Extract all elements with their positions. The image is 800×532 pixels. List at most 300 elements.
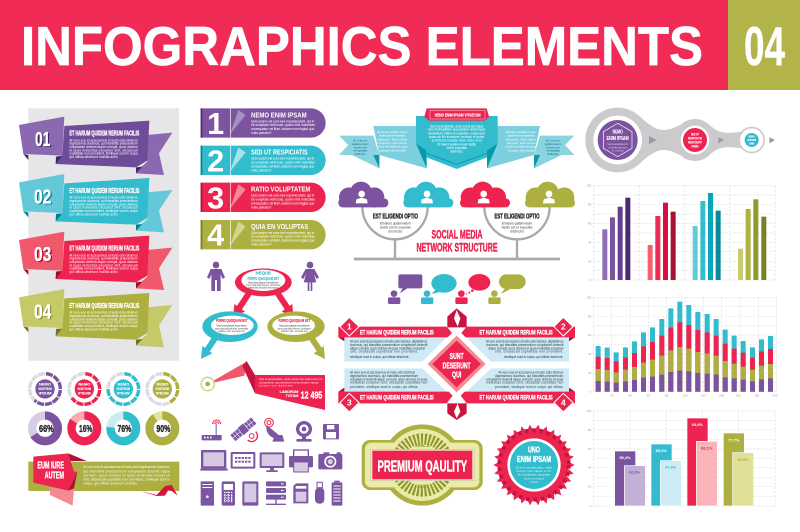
speech diagram: ipsum quia dolor sit amet, consectetur: [215, 327, 249, 330]
paired bar chart: 55,8%: [737, 457, 749, 462]
ribbon 03: dignissimos ducimus, qui blanditiis praesentium: [69, 257, 138, 261]
icon: battery: [332, 481, 342, 506]
icon: floppy disk: [323, 424, 339, 439]
ribbon 02: ET HARUM QUIDEM RERUM FACILIS: [69, 186, 139, 195]
light blue text panels: [344, 337, 569, 392]
ribbon 02: [19, 174, 172, 232]
stacked bar chart: 160: [736, 393, 741, 397]
panel body text: [350, 340, 564, 389]
speech diagram: PORRO QUISQUAM EST: [278, 318, 310, 323]
ribbon 01: [19, 117, 172, 175]
icon: man: [207, 262, 225, 291]
paired bar chart: 77,7%: [728, 438, 740, 443]
column chart: [586, 184, 775, 282]
folded banner: Et harum quidem rerum facilis: [437, 142, 476, 146]
folded banner: error sit voluptatem accusantium doloremque: [428, 128, 485, 132]
folded banner: Et harum: [546, 139, 560, 143]
speech diagram: PORRO QUISQUAM EST: [216, 318, 248, 323]
process flow: NOSTRUM: [747, 138, 756, 142]
social media heading: SOCIAL MEDIA: [431, 227, 483, 241]
ribbon 02: 02: [34, 186, 51, 208]
ribbon 01: ET HARUM QUIDEM RERUM FACILIS: [69, 129, 139, 138]
central diamond: [421, 328, 492, 400]
column chart: 40: [588, 240, 592, 244]
stacked bar chart: 60: [647, 393, 650, 397]
icon: usb stick: [315, 482, 324, 504]
panel: circular gauges: 16%: [79, 424, 92, 435]
ribbon 04: dignissimos ducimus, qui blanditiis praesentium: [69, 314, 138, 318]
folded banner: architecto beatae vitae dicta sunt: [432, 139, 482, 143]
process flow: [585, 108, 775, 172]
tab 3: 3: [207, 181, 224, 215]
cloud: purple: [338, 182, 388, 207]
ribbon 01: 01: [35, 129, 50, 151]
network labels left: facilis est et expedita: [380, 226, 411, 230]
tab 4: 4: [207, 219, 224, 253]
column chart: 80: [588, 203, 592, 207]
ribbon 02: cupiditate non provident, similique sunt in culpa: [69, 209, 138, 213]
panel: circular gauges: 66%: [39, 424, 54, 435]
tab 2: Quis autem vel eum iure reprehenderit, qui in: [251, 157, 314, 161]
folded banner: et expedita: [354, 149, 367, 153]
panel body text: dignissimos ducimus, qui blanditiis praesentium: [350, 374, 419, 378]
folded banner: quae ab illo inventore veritatis et quasi: [429, 135, 484, 139]
panel body text: similique sunt in culpa, qui officia deserunt.: [350, 355, 409, 359]
icon: person olive: [488, 290, 501, 304]
header banner: [0, 0, 800, 90]
folded banner: tempore, cum soluta: [378, 141, 407, 145]
folded banner: facilis est et expedita: [508, 134, 535, 138]
folded banner: quidem rerum: [352, 142, 369, 146]
ribbon 04: 04: [35, 302, 53, 324]
folded banner: et expedita: [546, 149, 560, 153]
tab 2: SED UT RESPICIATIS: [251, 150, 308, 157]
panel: people icons under bubbles: [388, 290, 501, 304]
folded banner: [339, 108, 574, 169]
tab 3: consequatur, vel illum, dolorem eum fugiat, quo: [251, 201, 314, 205]
process flow: omnis iste natus error: [608, 146, 627, 149]
column chart: 60: [588, 221, 592, 225]
panel body text: atque corrupti, quos dolores et quas molestias excepturi: [350, 346, 425, 350]
tab 2: consequatur, vel illum, dolorem eum fugiat, quo: [251, 164, 314, 168]
folded banner: NEMO ENIM IPSAM VITAECUM: [435, 112, 481, 118]
tab 1: 1: [207, 107, 224, 141]
ribbon callout: At vero eos et accusamus et iusto odio dignissimos ducimus,: [83, 465, 170, 469]
band headings: [360, 329, 553, 401]
speech diagram: adipisci velit, sed quia non numquam: [248, 287, 279, 290]
badge: starburst seal: Sed ut perspiciatis, unde: [516, 465, 553, 469]
ribbon 01: et quas molestias excepturi sint, obcaecati: [69, 148, 138, 152]
stacked bar chart: 20: [611, 393, 614, 397]
network labels right: EST ELIGENDI OPTIO: [494, 213, 540, 220]
panel: circular gauges: NEMO: [39, 381, 51, 386]
badge: starburst seal: ENIM IPSAM: [517, 455, 551, 464]
panel: circular gauges: IPSUM: [117, 391, 130, 396]
ribbon 01: dignissimos ducimus, qui blanditiis praesentium: [69, 142, 138, 146]
pointer flag: [201, 361, 325, 410]
band headings: ET HARUM QUIDEM RERUM FACILIS: [479, 329, 553, 336]
network labels right: [494, 213, 540, 234]
icon: woman: [301, 262, 319, 291]
badge: starburst seal: [493, 425, 575, 505]
folded banner: distinctio.: [547, 152, 559, 156]
cloud: olive: [525, 182, 575, 207]
network labels right: facilis est et expedita: [502, 226, 532, 230]
paired bar chart: 80: [588, 428, 592, 432]
ribbon callout: corrupti, quos dolores et quas molestias excepturi: [83, 473, 170, 477]
paired bar chart: 58,4%: [619, 455, 631, 460]
paired bar chart: 60: [588, 447, 592, 451]
folded banner: distinctio. Nam libero: [506, 137, 536, 141]
panel: circular gauges: 76%: [117, 424, 131, 435]
panel: circular gauges: IPSUM: [78, 391, 91, 396]
ribbon 02: 02: [35, 187, 53, 209]
paired bar chart: 93,9%: [692, 422, 703, 427]
panel: circular gauges: NEMO: [78, 381, 90, 386]
speech diagram: NEQUE: [256, 271, 271, 276]
ribbon 01: qui officia deserunt mollitia anim: [69, 155, 118, 159]
speech diagram: Neque porro quisquam est qui dolorem: [248, 281, 279, 284]
panel body text: provident, similique sunt in culpa, qui officia.: [350, 385, 418, 389]
speech diagram: ipsum quia dolor sit amet, consectetur: [246, 284, 281, 287]
icon: tablet: [231, 452, 255, 469]
pointer flag: 12 495: [301, 390, 323, 401]
ribbon 04: At vero eos et accusamus et iusto odio dicimus: [69, 311, 138, 315]
tab 2: [201, 144, 326, 178]
panel: circular gauges: NEMO: [156, 381, 168, 386]
folded banner: facilis est et expedita: [379, 134, 406, 138]
process flow: sit voluptat: [612, 150, 624, 153]
ribbon 04: [19, 289, 172, 347]
network labels right: distinctio: [510, 230, 524, 234]
ribbon 01: voluptatum deleniti atque corrupti, quos dolores: [69, 145, 138, 149]
network labels left: EST ELIGENDI OPTIO: [373, 213, 418, 220]
stacked bar chart: 80: [588, 314, 592, 318]
paired bar chart: 68,1%: [701, 445, 713, 450]
panel: flag and device icons: [200, 361, 342, 506]
speech diagram: adipisci velit, sed quia non: [218, 330, 246, 333]
red bands: [338, 327, 575, 403]
panel body text: At vero eos et accusamus et iusto odio dicimus, dignissimos: [350, 340, 428, 344]
paired bar chart: 0: [590, 504, 592, 508]
tab 4: [201, 219, 326, 253]
process flow: ENIM: [749, 141, 755, 145]
tab 4: Quis autem vel eum iure reprehenderit, qui in: [251, 231, 314, 235]
process flow: NEMO: [749, 135, 755, 139]
ribbon 03: 03: [35, 245, 53, 267]
ribbon 01: At vero eos et accusamus et iusto odio dicimus: [69, 138, 138, 142]
icon row 1: network devices: [202, 417, 339, 442]
icon: monitor: [260, 452, 284, 472]
central diamond: QUI: [452, 371, 461, 380]
process flow: Sed ut perspiciatis unde: [607, 143, 629, 146]
process flow: OMNIS: [691, 144, 699, 148]
column chart: 100: [586, 184, 592, 188]
panel body text: similique sunt in culpa, qui officia deserunt.: [504, 355, 563, 359]
folded banner: cumque nihil impedit: [379, 148, 405, 152]
speech diagram: PORRO QUISQUAM EST: [247, 276, 279, 281]
stacked bar chart: 20: [588, 371, 592, 375]
tab 4: nulla pariatur?: [251, 243, 272, 247]
band headings: ET HARUM QUIDEM RERUM FACILIS: [479, 394, 553, 401]
icon: server: [266, 481, 286, 505]
stacked bar chart: 120: [701, 393, 706, 397]
ribbon 03: ET HARUM QUIDEM RERUM FACILIS: [69, 244, 139, 253]
ribbon 02: voluptatum deleniti atque corrupti, quos dolores: [69, 202, 138, 206]
panel body text: sint, obcaecati cupiditate non provident,: [350, 350, 418, 354]
tab 1: consequatur, vel illum, dolorem eum fugiat, quo: [251, 127, 314, 131]
ribbon callout: culpa, qui officia deserunt mollitia: [83, 482, 137, 486]
stacked bar chart: 60: [588, 333, 592, 337]
paired bar chart: 100: [586, 409, 592, 413]
tab 4: consequatur, vel illum, dolorem eum fugiat, quo: [251, 239, 314, 243]
folded banner: tempore, cum soluta: [507, 141, 535, 145]
stacked bar chart: 200: [773, 393, 778, 397]
folded banner: facilis est: [354, 145, 367, 149]
pointer flag: TOTAM: [286, 394, 298, 398]
stacked bar chart: 100: [586, 295, 592, 299]
ribbon 03: 03: [34, 244, 51, 266]
panel: circular gauges: NEMO: [117, 381, 129, 386]
panel: process blobs and column chart: [585, 108, 775, 282]
tab 4: ea voluptate velit esse, quam nihil molestiae: [251, 235, 315, 239]
ribbon 02: et quas molestias excepturi sint, obcaecati: [69, 206, 138, 210]
icon row 3: hardware: [201, 481, 342, 506]
title: INFOGRAPHICS ELEMENTS: [21, 15, 703, 77]
folded banner: cumque nihil impedit: [508, 148, 534, 152]
folded banner: Et harum quidem rerum: [506, 130, 536, 134]
panel: circular gauges: [28, 374, 179, 506]
badge: starburst seal: UNO: [528, 445, 540, 454]
paired bar chart: 65,0%: [656, 448, 667, 453]
badge: premium quality: PREMIUM QAULITY: [377, 459, 467, 476]
icon: memory card: [293, 483, 308, 503]
ribbon 01: 01: [36, 130, 52, 152]
panel: circular gauges: 90%: [156, 424, 170, 435]
ribbon callout: sint, obcaecati cupiditate non provident, similique sunt in: [83, 478, 170, 482]
tab 1: NEMO ENIM IPSAM: [251, 112, 307, 119]
panel body text: ducimus, qui blanditiis praesentium voluptatum deleniti: [350, 343, 428, 347]
panel body text: provident, similique sunt in culpa, qui officia.: [495, 385, 563, 389]
panel: central diamond diagram: [338, 308, 575, 420]
panel: badges: [362, 424, 575, 506]
speech diagram: Neque porro quisquam est qui dolorem: [216, 325, 247, 328]
paired bar chart: 40: [588, 466, 592, 470]
stacked bar chart: [586, 295, 778, 397]
tab 3: Quis autem vel eum iure reprehenderit, qui in: [251, 194, 314, 198]
band headings: ET HARUM QUIDEM RERUM FACILIS: [360, 394, 434, 401]
stacked bar chart: 180: [754, 393, 759, 397]
icon: laptop: [200, 450, 228, 471]
process flow: RESPICIATIS: [688, 136, 702, 140]
ribbon 04: ET HARUM QUIDEM RERUM FACILIS: [69, 301, 139, 310]
badge: premium quality: [362, 424, 483, 506]
tab 2: 2: [207, 144, 224, 178]
ribbon 04: cupiditate non provident, similique sunt in culpa: [69, 324, 138, 328]
folded banner: distinctio.: [354, 152, 366, 156]
stacked bar chart: 100: [683, 393, 688, 397]
stacked bar chart: 140: [719, 393, 724, 397]
speech diagram: ipsum quia dolor sit amet, consectetur: [278, 327, 311, 330]
panel: circular gauges: IPSUM: [156, 391, 169, 396]
pointer flag: totam rem aperiam: [259, 384, 293, 388]
ribbon 03: voluptatum deleniti atque corrupti, quos dolores: [69, 260, 138, 264]
stacked bar chart: 0: [590, 390, 592, 394]
top and bottom arrow kites: [447, 308, 467, 420]
column chart: 0: [590, 278, 592, 282]
network connector lines: [354, 207, 560, 259]
ribbon 04: qui officia deserunt mollitia anim: [69, 327, 118, 331]
folded banner: quidem rerum: [545, 142, 562, 146]
pointer flag: voluptatem accusantium doloremque lapas,: [259, 380, 319, 384]
ribbon callout: AUTEM: [45, 470, 64, 481]
panel body text: sint, obcaecati cupiditate non provident,: [495, 350, 563, 354]
number diamonds: 3: [347, 398, 352, 408]
column chart: 20: [588, 259, 592, 263]
speech diagram: adipisci velit, sed quia non: [281, 330, 308, 333]
panel: numbered tabs and speech diagram: [201, 107, 326, 359]
ribbon callout: [28, 453, 179, 506]
panel body text: molestias excepturi sint, obcaecati cupiditate non: [350, 381, 427, 385]
icon: router: [202, 420, 222, 440]
paired bar chart: 20: [588, 485, 592, 489]
speech diagram: [201, 268, 325, 359]
speech bubbles row: [398, 274, 526, 295]
ribbon 03: At vero eos et accusamus et iusto odio dicimus: [69, 253, 138, 257]
icon: printer: [289, 450, 313, 472]
ribbon 02: At vero eos et accusamus et iusto odio dicimus: [69, 196, 138, 200]
icon: e-reader: [242, 481, 258, 506]
ribbon 02: qui officia deserunt mollitia anim: [69, 212, 118, 216]
tab 1: [201, 107, 326, 141]
band headings: ET HARUM QUIDEM RERUM FACILIS: [360, 329, 434, 336]
folded banner: est et expedita: [447, 146, 467, 150]
icon: camera: [318, 452, 342, 469]
folded banner: Et harum quidem rerum: [377, 130, 408, 134]
badge: starburst seal: omnis iste natus error: [517, 469, 551, 473]
tab 1: Quis autem vel eum iure reprehenderit, qui in: [251, 119, 314, 123]
folded banner: laudantium, totam rem aperiam, eaque ipsa: [428, 131, 485, 135]
cloud: teal: [403, 182, 453, 207]
icon row 2: computers: [200, 450, 342, 472]
panel body text: molestias excepturi sint, obcaecati cupiditate non: [486, 381, 563, 385]
panel body text: dignissimos ducimus, qui blanditiis praesentium: [495, 374, 564, 378]
number diamonds: [340, 317, 573, 412]
stacked bar chart: 40: [628, 393, 632, 397]
ribbon callout: qui blanditiis praesentium voluptatum deleniti atque: [83, 469, 170, 473]
badge: starburst seal: doloremque: [524, 476, 545, 480]
number diamonds: 2: [561, 322, 566, 332]
pointer flag: Sed ut perspiciatis, unde omnis iste natus error sit: [259, 377, 323, 381]
panel: numbered ribbons: [19, 108, 179, 361]
panel body text: voluptatum deleniti atque corrupti, quos dolores et quas: [350, 377, 428, 381]
tab 3: [201, 181, 326, 215]
network labels left: [373, 213, 418, 234]
badge: premium quality: 1995: [417, 483, 428, 489]
panel: circular gauges: IPSUM: [39, 391, 52, 396]
icon: satellite: [230, 417, 257, 442]
network labels left: Et harum, quidem rerum: [380, 222, 411, 226]
folded banner: nobis est eligendi optio: [377, 145, 408, 149]
ribbon 01: cupiditate non provident, similique sunt in culpa: [69, 152, 138, 156]
badge: starburst seal: totam: [530, 480, 539, 484]
panel: circular gauges: NOSTRUM: [117, 386, 130, 391]
panel: circular gauges: NOSTRUM: [156, 386, 169, 391]
tab 3: nulla pariatur?: [251, 205, 272, 209]
folded banner: distinctio. Nam libero: [377, 137, 408, 141]
icon: dish: [265, 418, 284, 442]
percentage donuts: [32, 415, 175, 441]
paired bar chart: 42,8%: [629, 470, 640, 475]
ribbon 04: voluptatum deleniti atque corrupti, quos dolores: [69, 317, 138, 321]
folded banner: nobis est eligendi optio: [506, 145, 537, 149]
panel body text: voluptatum deleniti atque corrupti, quos dolores et quas: [486, 377, 564, 381]
ribbon 03: qui officia deserunt mollitia anim: [69, 270, 118, 274]
panel: circular gauges: NOSTRUM: [78, 386, 91, 391]
social media heading: NETWORK STRUCTURE: [416, 241, 497, 255]
tab 4: QUIA EN VOLUPTAS: [251, 224, 309, 231]
icon: mobile phone: [222, 481, 235, 506]
icon: person teal: [421, 290, 433, 304]
ribbon callout: EUM IURE: [37, 460, 64, 471]
panel: teal folded banner and social network: [338, 108, 575, 295]
tab 1: ea voluptate velit esse, quam nihil molestiae: [251, 123, 315, 127]
badge: starburst seal: sit voluptatem accusant: [518, 473, 550, 477]
central diamond: DESERUNT: [443, 361, 471, 370]
icon: pc tower: [201, 481, 214, 506]
process flow: ENIM IPSAM: [607, 136, 629, 142]
tab 3: RATIO VOLUPTATEM: [251, 187, 310, 194]
tab 3: ea voluptate velit esse, quam nihil molestiae: [251, 197, 315, 201]
stacked bar chart: 40: [588, 352, 592, 356]
network labels right: Et harum, quidem rerum: [502, 222, 533, 226]
panel body text: At vero eos et accusamus et iusto odio dicimus: [498, 371, 564, 375]
process flow: NESCIUNT: [688, 140, 703, 144]
folded banner: Et harum: [353, 139, 368, 143]
panel body text: atque corrupti, quos dolores et quas molestias excepturi: [488, 346, 564, 350]
folded banner: distinctio.: [450, 150, 463, 154]
speech diagram: Neque porro quisquam est qui dolorem: [279, 325, 310, 328]
tab 2: ea voluptate velit esse, quam nihil molestiae: [251, 160, 315, 164]
icon: person red: [455, 290, 468, 304]
paired bar chart: 47,9%: [665, 464, 677, 469]
cloud: red: [460, 182, 510, 207]
segmented ring gauges: [30, 374, 178, 404]
panel body text: At vero eos et accusamus et iusto odio dicimus: [350, 371, 415, 375]
number diamonds: 4: [561, 398, 566, 408]
number diamonds: 1: [347, 322, 352, 332]
icon: person purple: [388, 290, 400, 304]
panel: circular gauges: NOSTRUM: [38, 386, 52, 391]
ribbon 03: et quas molestias excepturi sint, obcaecati: [69, 263, 138, 267]
panel body text: ducimus, qui blanditiis praesentium voluptatum deleniti: [486, 343, 564, 347]
central diamond: SUNT: [450, 352, 464, 361]
badge: premium quality: SINCE: [415, 443, 431, 449]
stacked bar chart: 80: [665, 393, 669, 397]
paired bar chart: [586, 409, 775, 508]
social media heading: [416, 227, 497, 255]
process flow: SED UT: [691, 132, 699, 136]
pointer flag: LABORUM: [280, 390, 298, 394]
folded banner: facilis est: [546, 145, 560, 149]
ribbon 04: 04: [34, 301, 51, 323]
ribbon 03: cupiditate non provident, similique sunt in culpa: [69, 267, 138, 271]
process flow: NEMO: [613, 129, 623, 135]
tab 1: nulla pariatur?: [251, 131, 272, 135]
ribbon 02: dignissimos ducimus, qui blanditiis praesentium: [69, 199, 138, 203]
panel body text: At vero eos et accusamus et iusto odio dicimus, dignissimos: [486, 340, 564, 344]
folded banner: Sed ut perspiciatis, unde omnis iste natus: [430, 124, 484, 128]
